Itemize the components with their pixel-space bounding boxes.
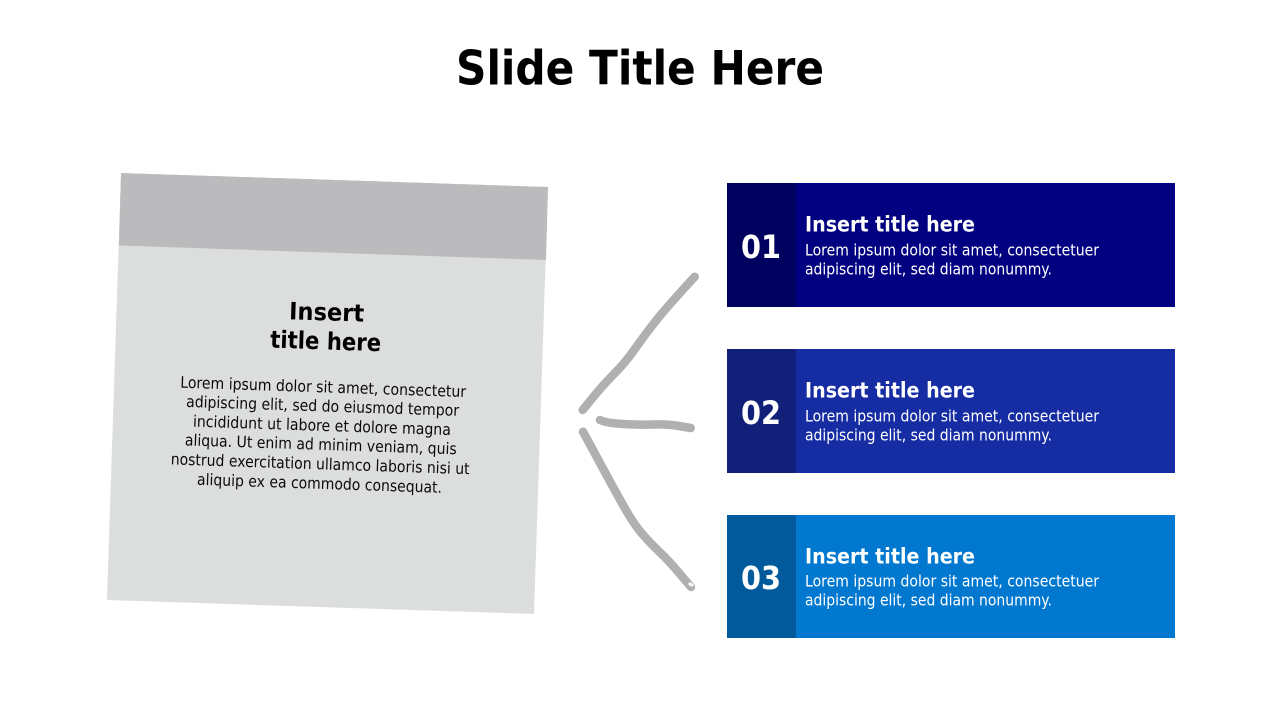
card body xyxy=(107,173,548,614)
card heading xyxy=(270,297,383,357)
card body text: Lorem ipsum dolor sit amet, consectetur xyxy=(180,373,467,401)
item 02 number: 02 xyxy=(741,394,781,432)
item 01 description xyxy=(805,240,1099,278)
icon: white fleck at connector end xyxy=(688,582,694,587)
card body text: aliquip ex ea commodo consequat. xyxy=(197,470,442,497)
hand-drawn connector lines xyxy=(583,277,695,587)
item 03 number tab xyxy=(727,515,796,638)
card header band xyxy=(119,173,548,260)
panel: item 02 xyxy=(727,349,1175,473)
item 03 description xyxy=(805,572,1099,610)
panel: note card xyxy=(107,173,548,614)
item 01 description: adipiscing elit, sed diam nonummy. xyxy=(805,260,1052,278)
card heading: title here xyxy=(270,326,382,357)
panel: item 01 xyxy=(727,183,1175,307)
card text xyxy=(170,293,475,498)
item 02 description: Lorem ipsum dolor sit amet, consectetuer xyxy=(805,406,1099,426)
item 03 description: adipiscing elit, sed diam nonummy. xyxy=(805,590,1052,610)
item 03 number: 03 xyxy=(741,559,781,597)
title: Slide Title Here xyxy=(456,42,824,96)
panel: item 03 xyxy=(727,515,1175,638)
item 01 number: 01 xyxy=(741,228,781,266)
item 02 background xyxy=(727,349,1175,473)
card body text: aliqua. Ut enim ad minim veniam, quis xyxy=(185,430,457,458)
item 03 description: Lorem ipsum dolor sit amet, consectetuer xyxy=(805,572,1099,590)
item 02 heading: Insert title here xyxy=(805,378,975,402)
item 03 heading: Insert title here xyxy=(805,544,975,568)
card body text: adipiscing elit, sed do eiusmod tempor xyxy=(186,392,460,420)
item 02 number tab xyxy=(727,349,796,473)
connector to item 03 xyxy=(583,432,691,587)
item 01 heading: Insert title here xyxy=(805,212,975,236)
item 01 number tab xyxy=(727,183,796,307)
item 02 description xyxy=(805,406,1099,444)
item 02 description: adipiscing elit, sed diam nonummy. xyxy=(805,426,1052,444)
item 01 description: Lorem ipsum dolor sit amet, consectetuer xyxy=(805,240,1099,260)
connector to item 01 xyxy=(583,277,695,410)
card heading: Insert xyxy=(289,297,365,328)
item 01 background xyxy=(727,183,1175,307)
card body text: nostrud exercitation ullamco laboris nisi ut xyxy=(170,449,470,478)
item 03 background xyxy=(727,515,1175,638)
card body text xyxy=(170,372,472,498)
connector to item 02 xyxy=(600,420,691,428)
card body text: incididunt ut labore et dolore magna xyxy=(193,412,451,439)
